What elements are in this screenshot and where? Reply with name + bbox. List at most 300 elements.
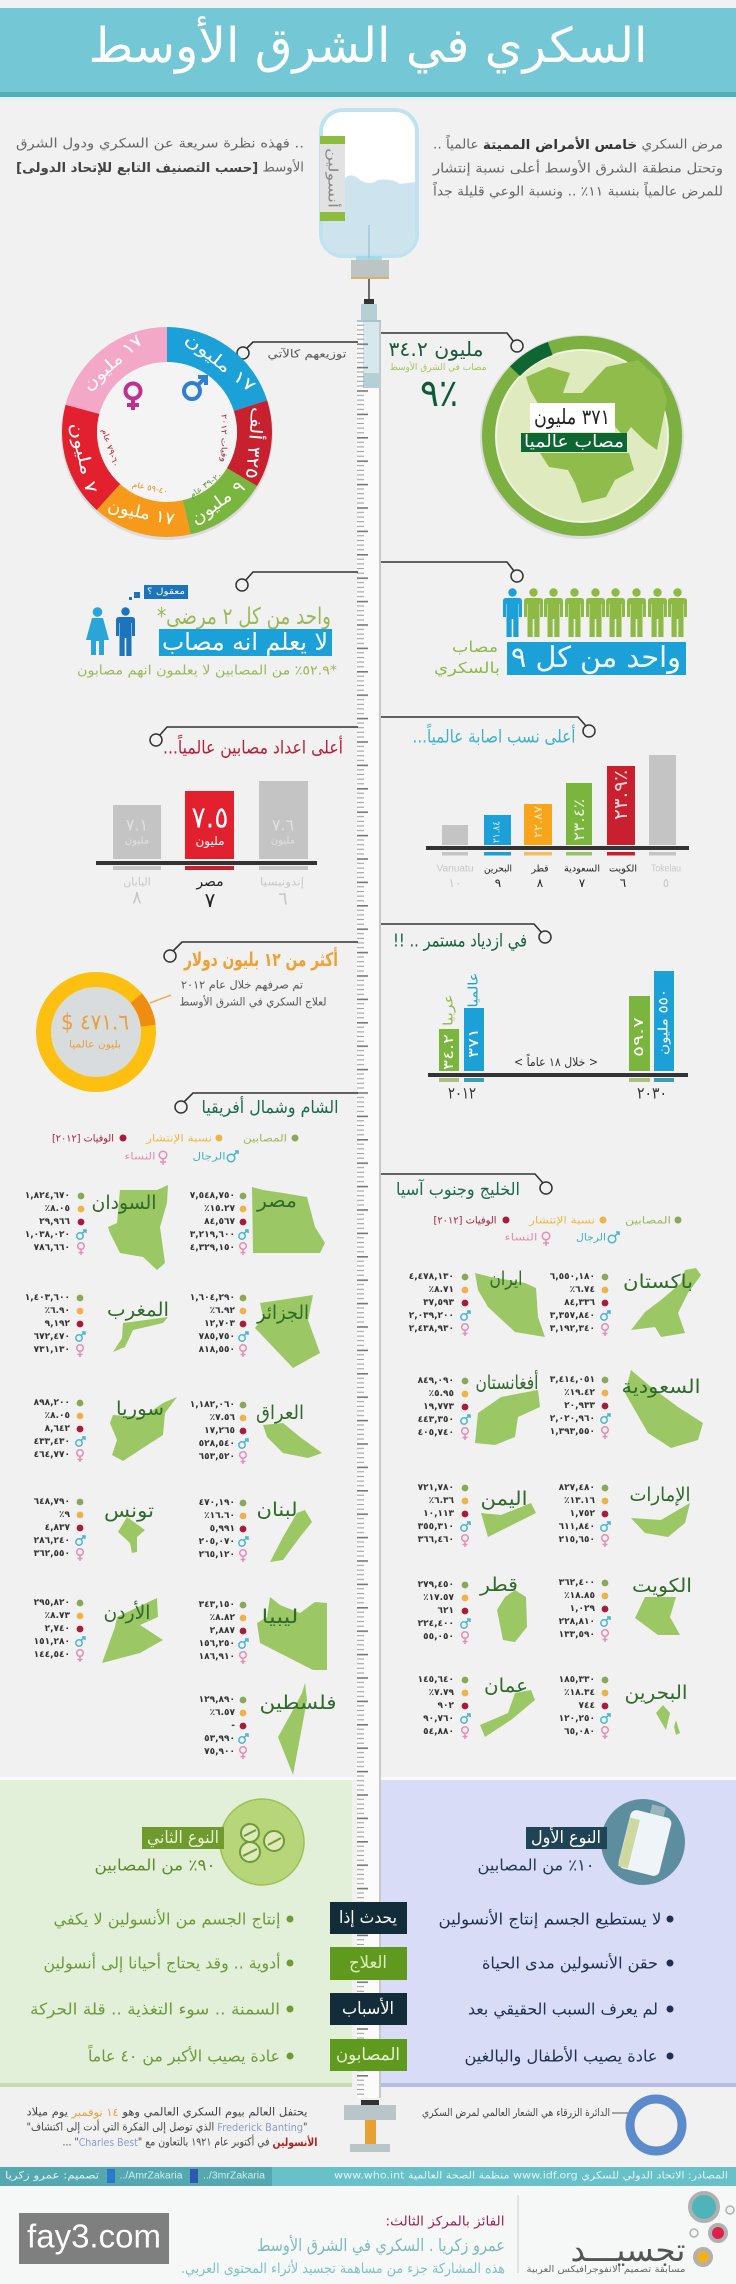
- country: Saudi Arabia: ٢,٠٢٠,٩٦٠: [550, 1414, 595, 1424]
- callout: blue circle symbol: الدائرة الزرقاء هي الشعار العالمي لمرض السكري: [422, 2107, 610, 2119]
- intro text left: [16, 136, 304, 176]
- country: Pakistan: ٪٦.٧٤: [570, 1285, 595, 1295]
- country: Sudan: السودان: [92, 1192, 156, 1214]
- country: Saudi Arabia: ٣,٤١٤,٠٥١: [550, 1375, 595, 1385]
- total in middle east: مصاب في الشرق الأوسط: [390, 361, 487, 373]
- country: UAE: ٪١٣.١٦: [564, 1496, 595, 1506]
- country: Egypt: ٣,٢١٩,٦٠٠: [190, 1230, 235, 1240]
- text: infected with diabetes: مصاب: [452, 638, 498, 656]
- country: Bahrain: ١٢٠,٢٥٠: [559, 1714, 595, 1724]
- text: cost detail: [180, 978, 326, 1008]
- country: Jordan: [34, 1598, 163, 1663]
- list: type 1 details: [438, 1908, 674, 2066]
- country: Kuwait: الكويت: [632, 1575, 692, 1597]
- country: Syria: ٪٨.٠٥: [45, 1411, 70, 1421]
- bar chart: highest rates: ٦: [620, 876, 626, 890]
- bar chart: highest counts: ٧.٦: [272, 816, 294, 834]
- country: Iran: ٤,٤٧٨,١٣٠: [409, 1272, 454, 1282]
- country: Morocco: ٪٦.٩٠: [45, 1306, 70, 1316]
- bar chart: highest counts: مصر: [195, 874, 224, 890]
- bar chart: highest rates: ٢٢.٨٧: [531, 805, 545, 838]
- country: Pakistan: ٦,٥٥٠,١٨٠: [550, 1272, 595, 1282]
- country: Iraq: [190, 1400, 322, 1464]
- text: world diabetes day: يحتفل العالم بيوم السكري العالمي وهو ١٤ نوفمبر يوم ميلاد: [26, 2106, 307, 2118]
- country: Jordan: الأردن: [104, 1601, 150, 1624]
- intro text right: [432, 135, 723, 200]
- country: Jordan: ١٤٤,٥٤٠: [34, 1650, 70, 1660]
- country: Libya: ٣٤٣,١٥٠: [199, 1600, 235, 1610]
- text: world diabetes day: الأنسولين في أكتوبر عام ١٩٢١ بالتعاون مع "Charles Best" ...: [62, 2134, 317, 2148]
- bar chart: growth 2012 to 2030: ٢٠١٢: [448, 1084, 476, 1102]
- gold ring: global cost: بليون عالميا: [69, 1040, 121, 1050]
- country: Egypt: ٧,٥٤٨,٧٥٠: [190, 1191, 235, 1201]
- country: Morocco: ٦٧٢,٤٧٠: [34, 1332, 70, 1342]
- footnote: unaware percent: *٥٢.٩٪ من المصابين لا يعلمون انهم مصابون: [77, 664, 338, 678]
- winner text: الفائز بالمركز الثالث:: [386, 2214, 504, 2230]
- bar chart: highest counts: ٧: [205, 888, 216, 912]
- winner text: عمرو زكريا . السكري في الشرق الأوسط: [257, 2235, 505, 2256]
- country: Egypt: ٪١٥.٢٧: [204, 1204, 235, 1214]
- text: cost detail: تم صرفهم خلال عام ٢٠١٢: [181, 978, 303, 992]
- country: Morocco: ٩,١٩٢: [45, 1319, 70, 1329]
- country: Qatar: ٢٧٩,٤٥٠: [418, 1580, 454, 1590]
- country: Sudan: ٧٨٦,٦٦٠: [34, 1243, 70, 1253]
- country: Bahrain: [559, 1675, 688, 1739]
- country: Syria: [34, 1397, 177, 1462]
- label: world total: ٣٧١ مليون: [534, 405, 610, 429]
- country: Iraq: ٥٢٨,٥٤٠: [199, 1439, 235, 1449]
- heading: highest rates: أعلى نسب اصابة عالمياً...: [412, 724, 576, 748]
- comparison labels: المصابون: [336, 2045, 400, 2065]
- total in middle east: [388, 337, 487, 415]
- bar chart: highest rates: ٢٣.٩٪: [610, 770, 632, 820]
- winner text: هذه المشاركة جزء من مساهمة تجسيد لأثراء المحتوى العربي.: [181, 2259, 505, 2277]
- country: Iraq: ١٧,٢٦٥: [204, 1426, 235, 1436]
- heading: rising: في ازدياد مستمر .. !!: [393, 930, 527, 952]
- country: Pakistan: باكستان: [623, 1271, 693, 1293]
- list: type 1 details: لم يعرف السبب الحقيقي بعد: [468, 2000, 658, 2020]
- country: Afghanistan: ١٩,٧٧٣: [423, 1402, 455, 1412]
- country: Jordan: ٢,٧٤٠: [45, 1624, 70, 1634]
- country: Kuwait: ١٣٣,٥٩٠: [559, 1630, 595, 1640]
- country: Qatar: قطر: [479, 1574, 518, 1596]
- country: Lebanon: [199, 1498, 312, 1562]
- country: Kuwait: ٢٢٨,٨١٠: [559, 1617, 595, 1627]
- list: type 2 details: أدوية .. وقد يحتاج أحيانا إلى أنسولين: [44, 1952, 280, 1974]
- country: Afghanistan: ٨٤٩,٠٩٠: [418, 1376, 454, 1386]
- country: Kuwait: [559, 1575, 692, 1642]
- country: Pakistan: ٨٤,٣٣٦: [564, 1298, 596, 1308]
- distribution label: توزيعهم كالآتي: [268, 348, 346, 360]
- footer strip: [0, 2167, 736, 2186]
- country: Lebanon: ٢٦٥,١٢٠: [199, 1550, 235, 1560]
- country: Palestine: -: [231, 1721, 235, 1731]
- legend: levant: الرجال: [192, 1152, 226, 1162]
- country: Bahrain: ٦٥,٠٨٠: [564, 1727, 595, 1737]
- country: Algeria: ١٢,٧٠٣: [204, 1319, 236, 1329]
- country: Tunisia: ٢٨٦,٢٤٠: [34, 1536, 70, 1546]
- text: world diabetes day: "الذي توصل إلى الفكرة التي أدت إلى اكتشاف Frederick Banting": [26, 2120, 308, 2134]
- country: Saudi Arabia: ٢٠,٩٣٣: [564, 1401, 596, 1411]
- country: Palestine: فلسطين: [260, 1692, 336, 1714]
- country: Iraq: ١,١٨٢,٠٦٠: [190, 1400, 235, 1410]
- bar chart: growth 2012 to 2030: ٣٧١: [466, 1028, 482, 1058]
- heading: highest counts: أعلى اعداد مصابين عالمياً...: [163, 735, 343, 758]
- country: Saudi Arabia: [550, 1370, 703, 1448]
- country: Iran: ٢,٠٣٩,٢٠٠: [409, 1311, 454, 1321]
- bar chart: highest counts: اليابان: [123, 876, 151, 888]
- social handles: ../AmrZakaria: [120, 2170, 183, 2182]
- bar chart: highest rates: ٨: [537, 876, 544, 890]
- designer credit: تصميم: عمرو زكريا: [5, 2170, 99, 2182]
- country: Jordan: ١٥١,٢٨٠: [34, 1637, 70, 1647]
- gold ring: global cost: [36, 972, 171, 1092]
- country: Bahrain: البحرين: [624, 1682, 688, 1704]
- people row: nine figures: [503, 588, 687, 637]
- country: Tunisia: ٦٤٨,٧٩٠: [34, 1497, 70, 1507]
- bar chart: highest rates: ٢١.٨٤: [492, 821, 502, 843]
- bar chart: growth 2012 to 2030: عربيا: [442, 994, 456, 1026]
- country: UAE: ١,٧٥٢: [570, 1509, 595, 1519]
- country: Sudan: ١,٠٣٨,٠٢٠: [25, 1230, 70, 1240]
- legend: gulf: النساء: [504, 1232, 538, 1244]
- panel header: type 1: [477, 1799, 685, 1885]
- legend: levant: المصابين: [243, 1134, 287, 1144]
- total in middle east: ٩٪: [420, 371, 458, 415]
- label: type 1: النوع الأول: [531, 1827, 601, 1848]
- gold ring: global cost: $ ٤٧١.٦: [61, 1010, 129, 1036]
- country: UAE: ٨٢٧,٤٨٠: [559, 1483, 595, 1493]
- bar chart: highest rates: ٢٣.٤٪: [570, 799, 588, 841]
- country: Sudan: ١,٨٢٤,٦٧٠: [25, 1191, 70, 1201]
- thought bubble: معقول ؟: [147, 587, 185, 597]
- text: ninety percent: ٩٠٪ من المصابين: [94, 1856, 216, 1876]
- bar chart: highest rates: Vanuatu: [436, 864, 474, 874]
- country: Egypt: ٤,٣٢٩,١٥٠: [190, 1243, 235, 1253]
- donut chart: distribution: ٤٠-٥٩ عام: [131, 480, 169, 496]
- connector: one in nine: [381, 562, 523, 582]
- panel header: type 2: [94, 1799, 304, 1885]
- donut chart: distribution: ١٧ مليون: [106, 496, 176, 530]
- country: Iran: [409, 1268, 545, 1337]
- legend: gulf: المصابين: [625, 1216, 671, 1226]
- bar chart: growth 2012 to 2030: ٢٠٣٠: [637, 1084, 667, 1102]
- connector: globe: [381, 333, 523, 352]
- country: Palestine: ١٢٩,٨٩٠: [199, 1695, 235, 1705]
- country: Sudan: [25, 1185, 168, 1270]
- country: Iran: ٣٧,٥٩٣: [423, 1298, 455, 1308]
- country: Yemen: ١٠,١١٣: [423, 1509, 455, 1519]
- bar chart: highest counts: [96, 781, 317, 912]
- list: type 2 details: [30, 1908, 294, 2066]
- text: cost detail: لعلاج السكري في الشرق الأوسط: [180, 994, 326, 1008]
- country: Jordan: ٢٩٥,٨٢٠: [34, 1598, 70, 1608]
- donut chart: distribution: ٦٠-٧٩ عام: [100, 428, 120, 468]
- country: Libya: ٪٨.٨٢: [210, 1613, 235, 1623]
- country: Syria: ٨,٦٤٢: [45, 1424, 70, 1434]
- logo: tajseed: تجسيـــد: [570, 2231, 686, 2269]
- country: Palestine: [199, 1683, 336, 1775]
- country: UAE: ٢١٥,٦٥٠: [559, 1535, 595, 1545]
- country: Qatar: ٦٢١: [438, 1606, 454, 1616]
- bar chart: highest rates: البحرين: [484, 864, 512, 874]
- country: Afghanistan: ٤٠٥,٧٤٠: [418, 1428, 454, 1438]
- label: type 2: النوع الثاني: [147, 1828, 219, 1848]
- country: Morocco: [25, 1293, 169, 1357]
- bottom credits band: [0, 2186, 736, 2284]
- country: Afghanistan: ٤٤٣,٣٥٠: [418, 1415, 454, 1425]
- country: Bahrain: ٧٤٤: [579, 1701, 595, 1711]
- country: UAE: [559, 1483, 690, 1547]
- country: Libya: ١٨٦,٩١٠: [199, 1652, 235, 1662]
- intro text left: الأوسط [حسب التصنيف التابع للإتحاد الدولى]: [16, 158, 304, 176]
- bar chart: highest rates: ١٠: [449, 876, 461, 890]
- country: Bahrain: ١٨٥,٣٣٠: [559, 1675, 595, 1685]
- country: Algeria: الجزائر: [256, 1302, 309, 1324]
- country: Tunisia: [34, 1497, 154, 1561]
- country: Qatar: [418, 1574, 527, 1644]
- country: Lebanon: ٢٠٥,٠٧٠: [199, 1537, 235, 1547]
- divider: [517, 2195, 519, 2273]
- country: Oman: ٩٠,٧٦٠: [423, 1714, 454, 1724]
- country: Iraq: ٪٧.٥٦: [210, 1413, 235, 1423]
- country: Iran: ايران: [490, 1268, 522, 1290]
- donut chart: distribution: وفيات ٢٠١٢: [220, 414, 228, 462]
- comparison labels: [330, 1902, 407, 2071]
- bar chart: growth 2012 to 2030: [428, 971, 688, 1102]
- country: Libya: ١٥٦,٢٥٠: [199, 1639, 235, 1649]
- bar chart: highest counts: مليون: [271, 836, 295, 846]
- country: Saudi Arabia: السعودية: [622, 1376, 700, 1398]
- country: Egypt: مصر: [256, 1190, 297, 1212]
- logo: tajseed: مسابقة تصميم الانفوجرافيكس العربية: [526, 2265, 686, 2275]
- country: Afghanistan: [418, 1370, 540, 1445]
- connector: levant: [175, 1093, 358, 1113]
- country: Tunisia: ٤,٨٣٧: [45, 1523, 70, 1533]
- heading: cost: أكثر من ١٢ بليون دولار: [183, 947, 338, 971]
- country: Oman: عمان: [484, 1675, 528, 1697]
- bar chart: growth 2012 to 2030: ٥٩.٧: [631, 1016, 647, 1057]
- country: Oman: ٪٧.٧٩: [429, 1688, 454, 1698]
- bar chart: highest rates: Tokelau: [651, 864, 681, 874]
- comparison labels: العلاج: [349, 1953, 387, 1973]
- total in middle east: مليون ٣٤.٢: [388, 337, 484, 361]
- country: Syria: ٤٣٣,٤٣٠: [34, 1437, 70, 1447]
- country: Oman: [418, 1675, 535, 1739]
- country: Syria: ٨٩٨,٢٠٠: [34, 1398, 70, 1408]
- thought bubble: [129, 585, 188, 600]
- bar chart: highest counts: ٦: [278, 888, 288, 910]
- legend: levant: الوفيات [٢٠١٢]: [52, 1134, 114, 1144]
- heading: gulf and south asia: الخليج وجنوب آسيا: [396, 1178, 520, 1200]
- country: Oman: ٩٠٢: [438, 1701, 455, 1711]
- list: type 1 details: حقن الأنسولين مدى الحياة: [482, 1952, 658, 1974]
- bar chart: growth 2012 to 2030: ٥٥٠ مليون: [656, 989, 672, 1055]
- legend: levant: النساء: [124, 1152, 156, 1162]
- country: Sudan: ٢٩,٩٦٦: [39, 1217, 71, 1227]
- country: Afghanistan: أفغانستان: [476, 1370, 538, 1394]
- intro text left: .. فهذه نظرة سريعة عن السكري ودول الشرق: [16, 136, 304, 152]
- donut chart: distribution: ١٧ مليون: [181, 329, 259, 397]
- country: Kuwait: ٣٦٢,٤٠٠: [559, 1578, 595, 1588]
- country: Yemen: اليمن: [480, 1488, 528, 1510]
- intro text right: وتحتل منطقة الشرق الأوسط أعلى نسبة إنتشار: [432, 160, 723, 176]
- country: Algeria: ٪٦.٩٢: [210, 1306, 235, 1316]
- bar chart: highest counts: ٧.١: [126, 816, 148, 834]
- legend: gulf: الرجال: [576, 1232, 606, 1244]
- country: Qatar: ٢٢٤,٤٠٠: [418, 1619, 454, 1629]
- donut chart: distribution: ٩ مليون: [187, 477, 249, 529]
- country: Tunisia: تونس: [104, 1500, 154, 1522]
- country: Tunisia: ٪٩: [59, 1510, 70, 1520]
- country: Sudan: ٪٨.٠٥: [45, 1204, 70, 1214]
- country: Lebanon: ٪١٦.٦٠: [204, 1511, 235, 1521]
- country: Kuwait: ٪١٨.٨٥: [564, 1591, 595, 1601]
- bar chart: highest counts: ٧.٥: [192, 800, 228, 836]
- country: Lebanon: لبنان: [256, 1499, 298, 1521]
- icon: insulin bottle in oval: [601, 1799, 685, 1885]
- bottle label: أنسولين: [324, 148, 342, 208]
- callout: one in nine: واحد من كل ٩: [511, 640, 681, 674]
- country: Iraq: العراق: [256, 1402, 304, 1424]
- winner text: [181, 2214, 505, 2277]
- country: Palestine: ٧٥,٩٠٠: [204, 1747, 235, 1757]
- country: Morocco: ١,٤٠٣,٦٠٠: [25, 1293, 70, 1303]
- connector: highest rates: [381, 717, 595, 737]
- icon: pills in oval: [220, 1799, 304, 1885]
- text: world diabetes day: [26, 2106, 317, 2148]
- bar chart: highest rates: ٧: [579, 876, 586, 890]
- text: one in two: واحد من كل ٢ مرضى*: [157, 604, 331, 630]
- callout: does not know: لا يعلم انه مصاب: [162, 628, 328, 656]
- bar chart: highest counts: إندونيسيا: [260, 876, 304, 888]
- country: Syria: ٤٦٤,٧٧٠: [34, 1450, 70, 1460]
- list: type 1 details: لا يستطيع الجسم إنتاج الأنسولين: [438, 1908, 662, 1930]
- label: infected worldwide: مصاب عالميا: [524, 432, 624, 452]
- country: Yemen: ٣٥٥,٣١٠: [418, 1522, 454, 1532]
- country: Iran: ٢,٤٣٨,٩٣٠: [409, 1324, 454, 1334]
- watermark: [19, 2213, 169, 2264]
- country: Morocco: ٧٣١,١٣٠: [34, 1345, 70, 1355]
- country: Jordan: ٪٨.٧٣: [45, 1611, 70, 1621]
- country: Libya: [199, 1597, 327, 1670]
- bar chart: highest rates: [426, 755, 689, 890]
- title banner: [0, 8, 736, 100]
- country: Afghanistan: ٪٥.٩٥: [429, 1389, 454, 1399]
- country: Egypt: [190, 1187, 325, 1255]
- icon: male: [184, 377, 206, 399]
- legend: gulf: [434, 1216, 682, 1246]
- country: Libya: ليبيا: [262, 1606, 298, 1628]
- country: Yemen: ٧٢١,٧٨٠: [418, 1483, 454, 1493]
- connector: gulf: [381, 1174, 552, 1194]
- country: Yemen: ٣٦٦,٤٦٠: [418, 1535, 454, 1545]
- country: Pakistan: [550, 1268, 701, 1337]
- legend: gulf: نسبة الإنتشار: [528, 1216, 595, 1226]
- list: type 2 details: عادة يصيب الأكبر من ٤٠ عاماً: [87, 2044, 280, 2066]
- country: Algeria: ٨١٨,٥٥٠: [199, 1345, 235, 1355]
- country: Oman: ٥٤,٨٨٠: [423, 1727, 454, 1737]
- icon: blue circle: [630, 2099, 682, 2151]
- bar chart: highest rates: السعودية: [564, 864, 600, 874]
- globe: [480, 335, 684, 539]
- country: Saudi Arabia: ٪١٩.٤٢: [564, 1388, 595, 1398]
- donut chart: distribution: ١٧ مليون: [79, 331, 147, 395]
- heading: levant and north africa: الشام وشمال أفريقيا: [202, 1096, 338, 1118]
- legend: levant: نسبة الإنتشار: [145, 1134, 212, 1144]
- country: Qatar: ٥٥,٠٥٠: [423, 1632, 454, 1642]
- connector: one in two: [236, 572, 358, 591]
- country: Palestine: ٥٣,٩٩٠: [204, 1734, 235, 1744]
- panel: type comparison backgrounds: [0, 1777, 736, 2087]
- legend: gulf: الوفيات [٢٠١٢]: [434, 1216, 496, 1226]
- icon: woman and man: [86, 607, 135, 656]
- donut chart: distribution: ٧ مليون: [65, 421, 101, 495]
- connector: rising: [381, 924, 551, 943]
- bar chart: highest rates: الكويت: [609, 864, 637, 874]
- bar chart: highest counts: مليون: [195, 834, 225, 849]
- insulin bottle: [320, 110, 417, 304]
- country: Algeria: [190, 1293, 320, 1368]
- country: Tunisia: ٣٦٢,٥٥٠: [34, 1549, 70, 1559]
- country: Morocco: المغرب: [107, 1299, 169, 1321]
- callout: blue circle symbol: [422, 2099, 682, 2151]
- donut chart: distribution: ٣٢٥ ألف: [241, 406, 269, 480]
- country: UAE: الإمارات: [630, 1484, 690, 1506]
- comparison labels: الأسباب: [342, 1998, 394, 2019]
- intro text right: للمرض عالمياً بنسبة ١١٪ .. ونسبة الوعي قليلة جداً: [433, 182, 723, 200]
- country: Pakistan: ٣,١٩٢,٣٤٠: [550, 1324, 595, 1334]
- bar chart: growth 2012 to 2030: ٣٤.٢: [441, 1034, 457, 1070]
- country: Bahrain: ٪١٨.٣٤: [564, 1688, 595, 1698]
- bar chart: highest rates: ٥: [663, 876, 669, 890]
- country: Syria: سوريا: [116, 1398, 164, 1420]
- country: Algeria: ١,٦٠٤,٢٩٠: [190, 1293, 235, 1303]
- bar chart: highest rates: ٩: [495, 876, 501, 890]
- country: Lebanon: ٥,٩٩١: [210, 1524, 235, 1534]
- legend: levant: [52, 1134, 298, 1165]
- country: Oman: ١٤٥,٦٤٠: [418, 1675, 454, 1685]
- country: Yemen: ٪٦.٣٦: [429, 1496, 454, 1506]
- country: Pakistan: ٣,٣٥٧,٨٤٠: [550, 1311, 595, 1321]
- country: Kuwait: ١,٠٢٩: [570, 1604, 595, 1614]
- icon: female: [126, 384, 140, 410]
- country: Algeria: ٧٨٥,٧٥٠: [199, 1332, 235, 1342]
- logo: tajseed: [526, 2193, 734, 2275]
- bar chart: growth 2012 to 2030: عالميا: [466, 972, 482, 1008]
- country: Qatar: ٪١٧.٥٧: [423, 1593, 454, 1603]
- bar chart: highest counts: ٨: [132, 888, 142, 908]
- comparison labels: يحدث إذا: [339, 1908, 397, 1928]
- text: infected with diabetes: بالسكري: [434, 659, 500, 678]
- social handles: [107, 2169, 265, 2183]
- sources: المصادر: الاتحاد الدولي للسكري www.idf.org منظمة الصحة العالمية www.who.int: [334, 2170, 728, 2182]
- country: Iraq: ٦٥٣,٥٢٠: [199, 1452, 235, 1462]
- country: Lebanon: ٤٧٠,١٩٠: [199, 1498, 235, 1508]
- intro text right: مرض السكري خامس الأمراض المميتة عالمياً ..: [433, 135, 723, 152]
- title: السكري في الشرق الأوسط: [88, 15, 648, 74]
- syringe column: [357, 304, 381, 2098]
- country: Egypt: ٨٤,٥٦٧: [204, 1217, 236, 1227]
- country: Palestine: ٪٦.٥٧: [210, 1708, 235, 1718]
- connector: cost: [164, 942, 358, 962]
- text: infected with diabetes: [434, 638, 500, 678]
- country: Saudi Arabia: ١,٣٩٣,٥٥٠: [550, 1427, 595, 1437]
- social handles: ../3mrZakaria: [203, 2170, 265, 2182]
- country: Libya: ٢,٨٨٧: [210, 1626, 235, 1636]
- country: Yemen: [418, 1483, 536, 1547]
- connector: highest counts: [150, 727, 358, 746]
